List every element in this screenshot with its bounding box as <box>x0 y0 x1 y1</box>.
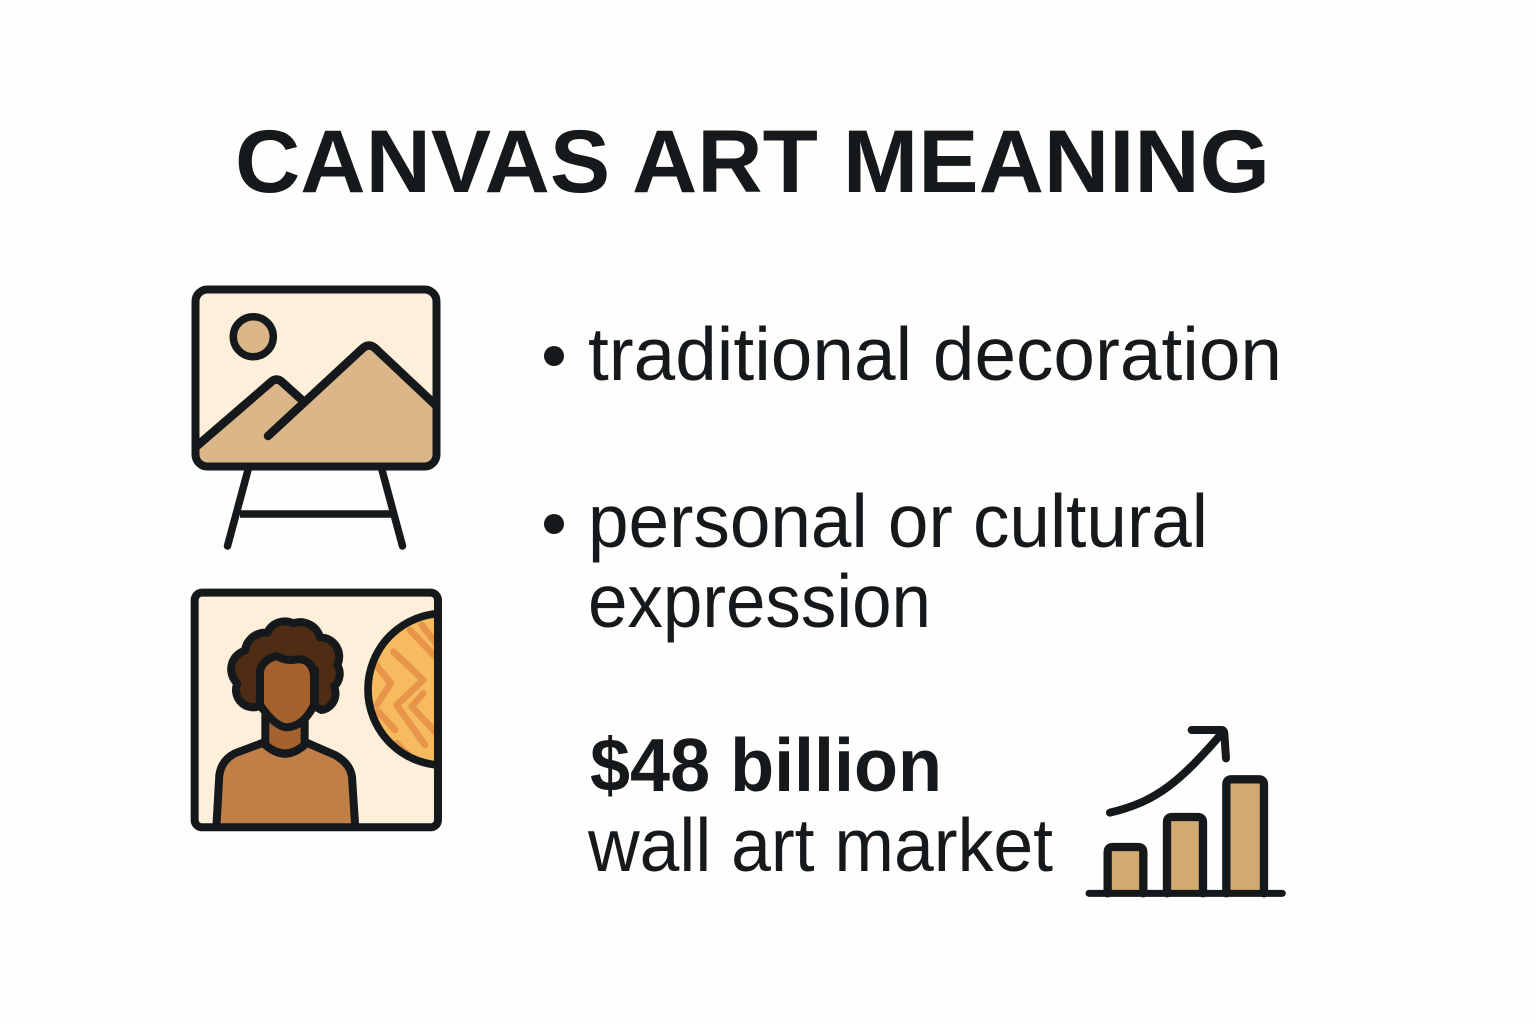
bullet: personal or cultural expression: personal or cultural <box>588 479 1208 563</box>
bars <box>1108 779 1264 893</box>
bullet: personal or cultural expression <box>544 479 1208 643</box>
portrait background <box>195 593 438 827</box>
growth arrow <box>1110 730 1226 813</box>
face <box>260 656 314 727</box>
canvas frame <box>196 290 436 466</box>
sun <box>233 317 273 357</box>
baseline <box>1089 883 1282 904</box>
bullet: traditional decoration: traditional decoration <box>588 312 1282 396</box>
icon: landscape canvas on easel <box>190 290 445 546</box>
stat: wall art market size: $48 billion <box>590 723 942 807</box>
icon: portrait of a person with patterned circle <box>190 588 442 832</box>
patterned circle <box>364 610 434 768</box>
stat: wall art market size <box>587 723 1053 887</box>
mountains <box>200 341 432 462</box>
shirt <box>216 743 356 833</box>
icon: rising bar chart with arrow <box>1089 730 1282 893</box>
canvas background <box>196 290 436 466</box>
title: CANVAS ART MEANING <box>235 111 1270 211</box>
easel legs <box>228 470 402 546</box>
neck <box>265 715 305 753</box>
stat: wall art market size: wall art market <box>587 803 1053 887</box>
bullet: personal or cultural expression: expression <box>588 559 931 643</box>
portrait frame <box>195 593 438 827</box>
hair <box>231 621 340 710</box>
